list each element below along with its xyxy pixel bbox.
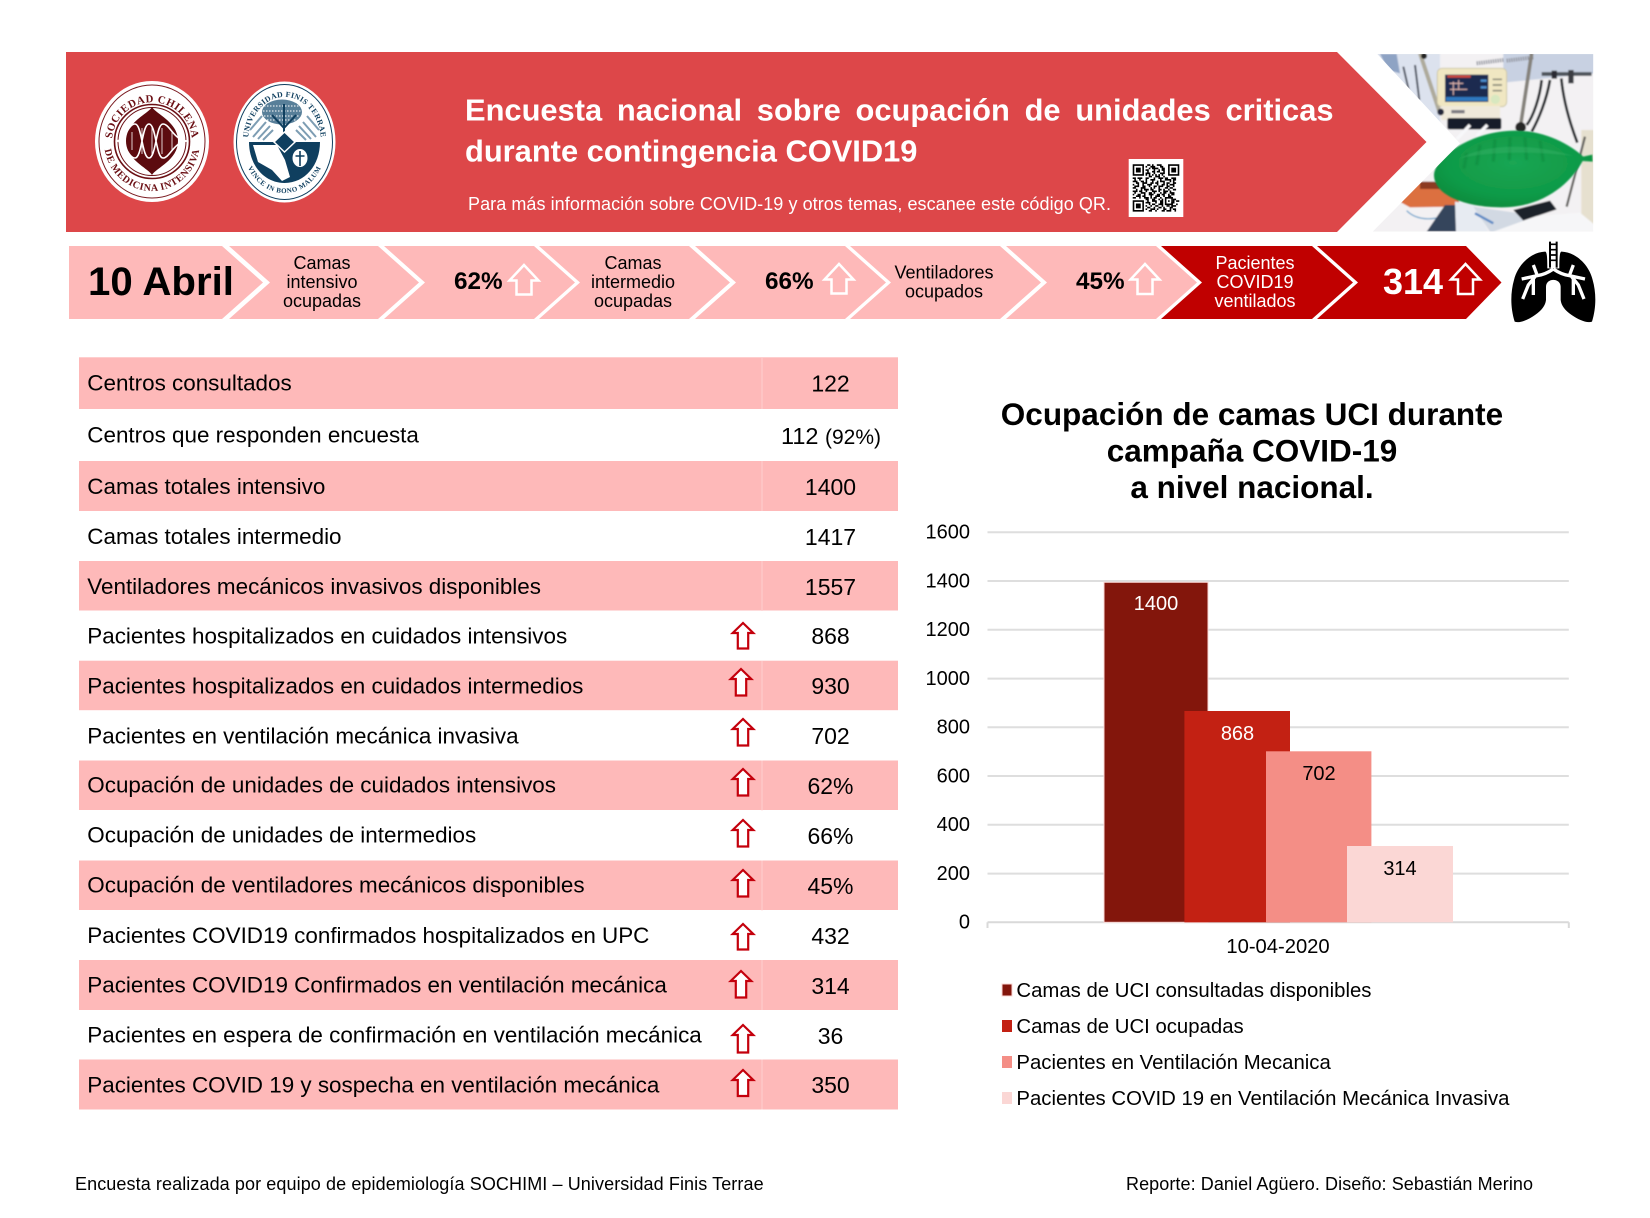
- row: centros consultados: 122: [811, 371, 850, 397]
- chevron: 62%: 62%: [454, 268, 503, 295]
- x axis label: 10-04-2020: [1226, 936, 1330, 958]
- row: hospitalizados intermedios: 930: [811, 673, 850, 699]
- row: espera de confirmación: [87, 1023, 843, 1052]
- row: covid confirmados UPC: Pacientes COVID19 confirmados hospitalizados en UPC: [87, 923, 649, 948]
- table: survey indicators: [79, 357, 898, 1110]
- row: covid y sospecha: 350: [811, 1072, 850, 1098]
- chart title: [1001, 396, 1503, 505]
- chevron: 314: 314: [1383, 261, 1443, 302]
- row: ocupación intermedios: [87, 820, 854, 849]
- banner subtitle: Para más información sobre COVID-19 y otros temas, escanee este código QR.: [468, 194, 1111, 214]
- row: hospitalizados intermedios: [87, 669, 850, 699]
- row: ventiladores disponibles: 1557: [805, 574, 856, 600]
- row: centros consultados: [87, 371, 850, 397]
- y axis labels: 800: [937, 717, 970, 739]
- chevron: camas intensivo label: ocupadas: [283, 291, 361, 311]
- chevron: camas intermedio label: [539, 246, 730, 319]
- chevron: camas intensivo label: intensivo: [286, 272, 358, 292]
- y axis labels: 0: [959, 912, 970, 934]
- chevron: 45%: 45%: [1076, 268, 1125, 295]
- chevron: pacientes ventilados label: ventilados: [1214, 291, 1296, 311]
- row: hospitalizados intensivos: Pacientes hospitalizados en cuidados intensivos: [87, 623, 567, 648]
- y axis labels: [926, 522, 970, 934]
- bar: ventilación mecánica 702: 702: [1302, 763, 1336, 785]
- bar: camas ocupadas 868: [1184, 711, 1290, 922]
- row: espera de confirmación: Pacientes en espera de confirmación en ventilación mecánica: [87, 1023, 702, 1048]
- row: covid confirmados ventilación: [87, 971, 850, 999]
- row: camas totales intermedio: Camas totales intermedio: [87, 524, 342, 549]
- chevron strip: date and indicators: [69, 246, 1502, 319]
- legend item: covid ventilación: Pacientes COVID 19 en Ventilación Mecánica Invasiva: [1016, 1088, 1510, 1110]
- row: espera de confirmación: 36: [818, 1023, 843, 1049]
- bar: camas ocupadas 868: 868: [1221, 723, 1254, 745]
- logo: Universidad Finis Terrae: VINCE IN BONO MALUM: [248, 166, 321, 194]
- row: centros que responden: [87, 422, 881, 449]
- row: ocupación intensivos: 62%: [807, 773, 854, 799]
- chevron: camas intermedio label: intermedio: [591, 272, 675, 292]
- bar: camas disponibles 1400: 1400: [1134, 593, 1178, 615]
- QR code: [1129, 159, 1183, 217]
- chevron: 66%: [695, 246, 886, 319]
- row: ocupación intensivos: [87, 769, 854, 799]
- chevron: camas intensivo label: Camas: [293, 253, 351, 273]
- chevron: 66%: 66%: [765, 268, 814, 295]
- row: ventilación mecánica invasiva: Pacientes en ventilación mecánica invasiva: [87, 724, 519, 749]
- logo: Sociedad Chilena de Medicina Intensiva: [95, 81, 209, 202]
- row: covid confirmados UPC: 432: [811, 923, 850, 949]
- row: ventiladores disponibles: [87, 574, 856, 600]
- row: covid confirmados ventilación: Pacientes COVID19 Confirmados en ventilación mecánica: [87, 973, 667, 998]
- footer credit left: Encuesta realizada por equipo de epidemiología SOCHIMI – Universidad Finis Terrae: [75, 1174, 764, 1194]
- row: camas totales intensivo: [87, 474, 856, 500]
- row: covid confirmados ventilación: 314: [811, 973, 850, 999]
- logo: Sociedad Chilena de Medicina Intensiva: SOCIEDAD CHILENA: [105, 95, 198, 138]
- chevron: date: [69, 246, 263, 319]
- legend item: ventilación mecánica: Pacientes en Ventilación Mecanica: [1016, 1052, 1331, 1074]
- row: centros que responden: Centros que responden encuesta: [87, 422, 419, 447]
- chevron: ventiladores label: [850, 246, 1041, 319]
- banner title: Encuesta nacional sobre ocupación de unidades criticas: [465, 92, 1334, 128]
- chevron: pacientes ventilados label: [1161, 246, 1353, 319]
- y axis labels: 200: [937, 863, 970, 885]
- row: camas totales intermedio: [87, 524, 856, 550]
- row: ocupación intermedios: Ocupación de unidades de intermedios: [87, 823, 476, 848]
- chevron: ventiladores label: Ventiladores: [894, 262, 994, 282]
- row: ocupación ventiladores: 45%: [807, 873, 854, 899]
- y axis labels: 1200: [926, 619, 970, 641]
- y axis labels: 1600: [926, 522, 970, 544]
- row: covid y sospecha: Pacientes COVID 19 y sospecha en ventilación mecánica: [87, 1072, 660, 1097]
- chevron: 45%: [1006, 246, 1197, 319]
- row: camas totales intensivo: Camas totales intensivo: [87, 474, 325, 499]
- row: camas totales intensivo: 1400: [805, 474, 856, 500]
- logo: Universidad Finis Terrae: UNIVERSIDAD FINIS TERRAE: [243, 92, 326, 137]
- y axis labels: 1000: [926, 668, 970, 690]
- row: ventilación mecánica invasiva: 702: [811, 723, 850, 749]
- chevron: pacientes ventilados label: COVID19: [1216, 272, 1294, 292]
- chevron: date: 10 Abril: [88, 259, 234, 304]
- bar chart: [926, 522, 1569, 958]
- row: covid y sospecha: [87, 1070, 850, 1098]
- icon: lungs: [1511, 242, 1595, 322]
- legend item: camas ocupadas: Camas de UCI ocupadas: [1016, 1016, 1244, 1038]
- y axis labels: 1400: [926, 570, 970, 592]
- bar: camas disponibles 1400: [1104, 582, 1208, 922]
- row: covid confirmados UPC: [87, 923, 850, 950]
- chevron: 314: [1317, 246, 1502, 319]
- chevron: camas intensivo label: [229, 246, 419, 319]
- table row backgrounds: [79, 357, 898, 1110]
- chart title: Ocupación de camas UCI durante: [1001, 396, 1503, 432]
- logo: Universidad Finis Terrae: [234, 82, 336, 202]
- bar: covid ventilación 314: 314: [1383, 858, 1417, 880]
- row: camas totales intermedio: 1417: [805, 524, 856, 550]
- footer credit right: Reporte: Daniel Agüero. Diseño: Sebastián Merino: [1126, 1174, 1533, 1194]
- row: ventilación mecánica invasiva: [87, 719, 850, 749]
- row: centros que responden: 112 (92%): [781, 423, 881, 449]
- bar: covid ventilación 314: [1347, 846, 1453, 922]
- chevron: ventiladores label: ocupados: [905, 282, 983, 302]
- y axis labels: 600: [937, 766, 970, 788]
- chevron: camas intermedio label: Camas: [604, 253, 662, 273]
- row: hospitalizados intensivos: 868: [811, 623, 850, 649]
- row: centros consultados: Centros consultados: [87, 371, 292, 396]
- chevron: 62%: [384, 246, 575, 319]
- row: ocupación ventiladores: [87, 870, 854, 899]
- photo: ventilator and green bag: [1370, 53, 1597, 233]
- banner title: [465, 92, 1334, 168]
- row: ocupación intermedios: 66%: [807, 823, 854, 849]
- row: ocupación ventiladores: Ocupación de ventiladores mecánicos disponibles: [87, 873, 585, 898]
- banner title: durante contingencia COVID19: [465, 134, 917, 168]
- chart legend: [1002, 980, 1510, 1110]
- legend item: camas disponibles: Camas de UCI consultadas disponibles: [1016, 980, 1371, 1002]
- y axis labels: 400: [937, 814, 970, 836]
- row: ocupación intensivos: Ocupación de unidades de cuidados intensivos: [87, 773, 556, 798]
- logo: Sociedad Chilena de Medicina Intensiva: DE MEDICINA INTENSIVA: [104, 148, 200, 192]
- chevron: camas intermedio label: ocupadas: [594, 291, 672, 311]
- header banner: [66, 52, 1426, 232]
- chart title: a nivel nacional.: [1130, 469, 1374, 505]
- row: ventiladores disponibles: Ventiladores mecánicos invasivos disponibles: [87, 574, 541, 599]
- row: hospitalizados intensivos: [87, 623, 850, 649]
- bar: ventilación mecánica 702: [1266, 751, 1371, 922]
- row: hospitalizados intermedios: Pacientes hospitalizados en cuidados intermedios: [87, 674, 583, 699]
- chevron: pacientes ventilados label: Pacientes: [1215, 253, 1295, 273]
- chart title: campaña COVID-19: [1107, 432, 1397, 468]
